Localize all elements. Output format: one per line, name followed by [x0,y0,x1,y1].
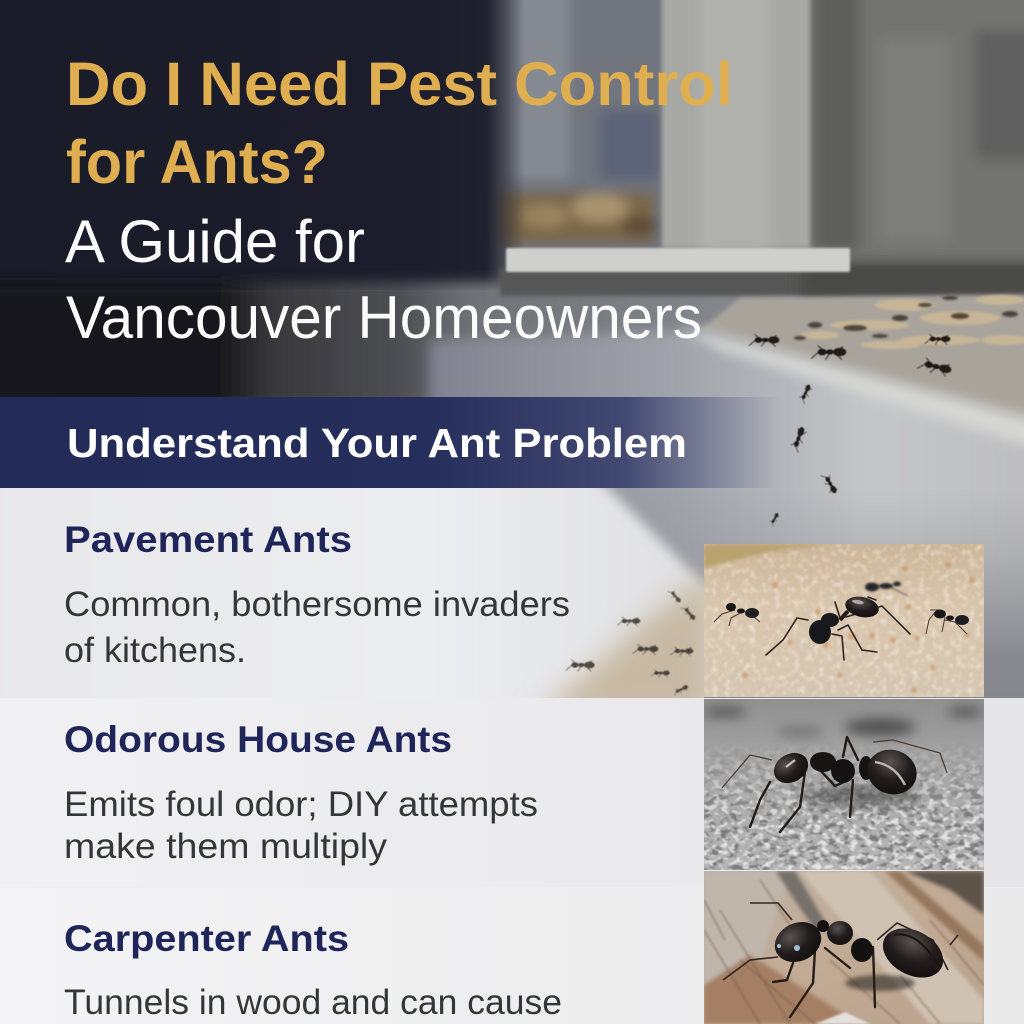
subtitle: Vancouver Homeowners [66,284,702,351]
right ant [926,610,969,634]
text block: pavement ants [64,518,570,670]
title [66,50,733,196]
text block: pavement ants: of kitchens. [64,631,246,670]
text block: odorous house ants: Odorous House Ants [64,718,452,760]
big central ant [766,594,910,660]
left ant [714,603,760,626]
title: Do I Need Pest Control [66,50,733,118]
text block: carpenter ants [64,917,562,1022]
lower blurred counter [0,274,748,397]
shelf [506,248,850,272]
counter front face [424,326,1024,648]
text block: odorous house ants [64,718,538,866]
counter top surface [700,294,1024,430]
text block: pavement ants: Pavement Ants [64,518,352,560]
heading: understand your ant problem: Understand Your Ant Problem [67,420,687,466]
text block: pavement ants: Common, bothersome invaders [64,585,570,624]
small ants on the sand [566,588,697,696]
subtitle [65,208,702,351]
panel: pavement ants background [0,488,704,698]
photo: odorous house ant on grey stone [703,699,984,870]
background photo: blurred kitchen counter [0,0,1024,720]
subtitle: A Guide for [65,208,365,275]
background ant [865,582,908,596]
panel: carpenter ants background [0,888,1024,1024]
title: for Ants? [66,128,328,196]
shelf shadow [500,268,1024,296]
white column [662,0,810,248]
dark top-left overlay [0,0,525,290]
text block: odorous house ants: Emits foul odor; DIY attempts [64,785,538,824]
crumbs on the counter [800,295,1024,349]
section band background [0,397,780,488]
icon: ants marching on the counter edge [749,334,953,526]
text block: carpenter ants: Tunnels in wood and can cause [64,983,562,1022]
blue-grey jar [495,0,665,260]
wall on the right [810,0,1024,258]
big ant [722,737,947,832]
panel: odorous house ants background [0,698,1024,887]
photo: pavement ants on sand [704,544,984,697]
text block: odorous house ants: make them multiply [64,827,388,866]
text block: carpenter ants: Carpenter Ants [64,917,349,959]
big ant [723,903,958,1017]
photo: carpenter ant on wood [704,871,984,1024]
